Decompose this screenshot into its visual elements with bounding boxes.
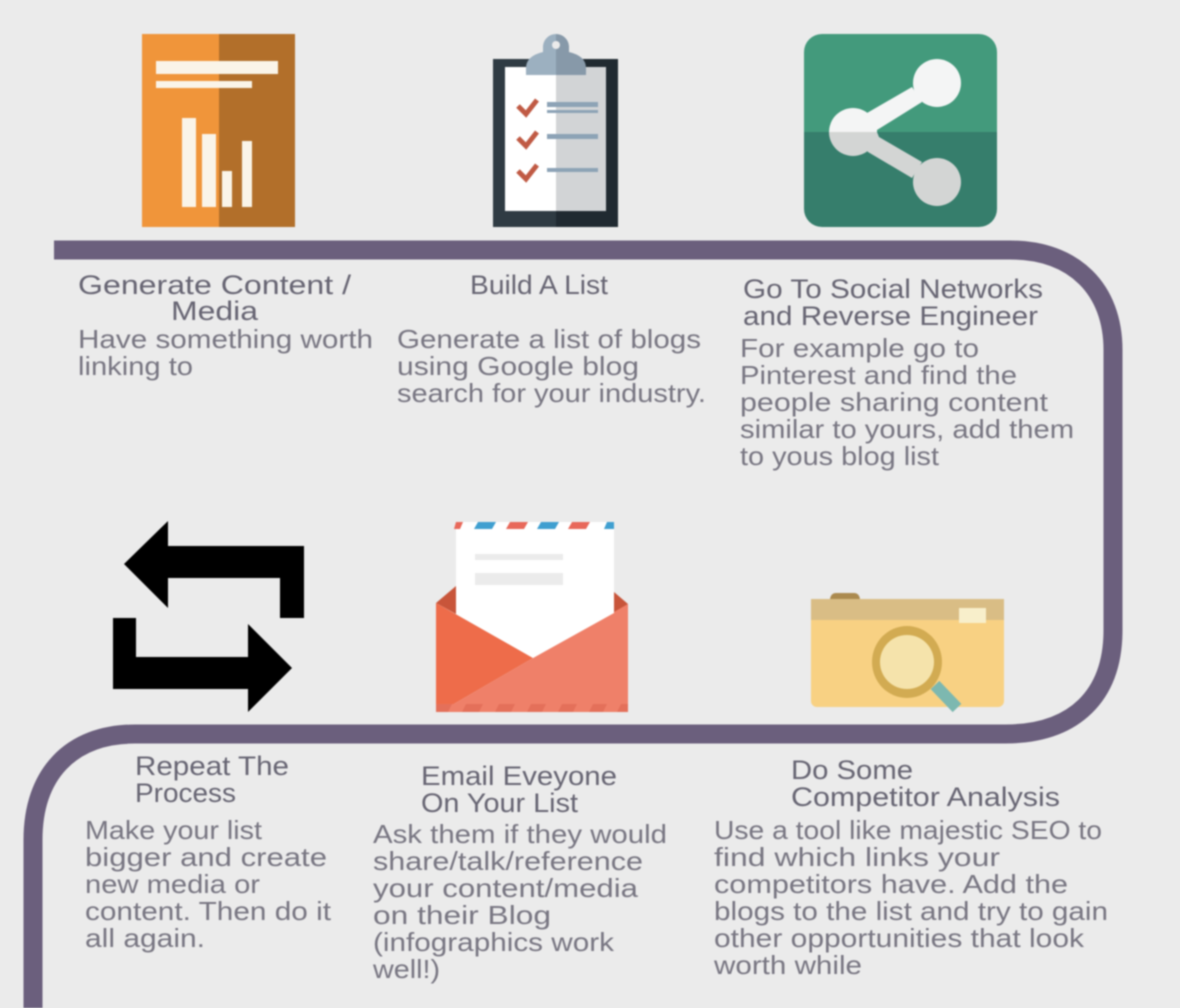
heading: repeat the process: Repeat The xyxy=(135,751,289,781)
heading: generate content xyxy=(78,270,352,326)
text: repeat the process body: content. Then do it xyxy=(85,896,332,926)
text: competitor analysis body xyxy=(713,815,1108,980)
text: social networks body: people sharing content xyxy=(740,387,1049,417)
text: repeat the process body: all again. xyxy=(85,923,205,953)
text: repeat the process body xyxy=(85,815,332,953)
heading: competitor analysis: Do Some xyxy=(791,755,913,785)
heading: generate content: Media xyxy=(171,296,259,326)
heading: social networks xyxy=(743,274,1043,331)
icon: folder camera with magnifier xyxy=(811,593,1004,708)
text: competitor analysis body: other opportunities that look xyxy=(714,923,1085,953)
panel: email everyone xyxy=(372,522,667,984)
text: build a list body xyxy=(397,324,706,408)
icon: repeat arrows xyxy=(113,521,304,712)
text: social networks body: Pinterest and find the xyxy=(740,360,1017,390)
timeline path xyxy=(33,250,1113,1008)
heading: competitor analysis: Competitor Analysis xyxy=(791,782,1060,812)
icon: open envelope with letter xyxy=(436,522,628,712)
heading: repeat the process: Process xyxy=(135,778,236,808)
text: social networks body: to yous blog list xyxy=(740,441,940,471)
text: build a list body: Generate a list of blogs xyxy=(397,324,701,354)
text: social networks body: For example go to xyxy=(740,333,979,363)
icon: report document xyxy=(142,34,295,227)
text: email everyone body: (infographics work xyxy=(373,927,615,957)
text: email everyone body xyxy=(372,819,667,984)
text: repeat the process body: Make your list xyxy=(85,815,263,845)
heading: repeat the process xyxy=(135,751,289,808)
text: social networks body: similar to yours, add them xyxy=(740,414,1074,444)
heading: email everyone: Email Eveyone xyxy=(421,761,617,791)
heading: social networks: and Reverse Engineer xyxy=(743,301,1038,331)
text: generate content body xyxy=(78,324,373,381)
text: email everyone body: well!) xyxy=(372,954,440,984)
text: social networks body xyxy=(740,333,1074,471)
panel: generate content xyxy=(78,34,373,381)
text: repeat the process body: bigger and create xyxy=(85,842,327,872)
icon: share xyxy=(804,34,997,227)
heading: competitor analysis xyxy=(791,755,1060,812)
icon: clipboard checklist xyxy=(493,34,618,227)
panel: social networks xyxy=(740,34,1074,471)
heading: email everyone: On Your List xyxy=(421,788,579,818)
text: competitor analysis body: find which links your xyxy=(714,842,1000,872)
text: email everyone body: Ask them if they would xyxy=(373,819,667,849)
heading: email everyone xyxy=(421,761,617,818)
heading: social networks: Go To Social Networks xyxy=(743,274,1043,304)
text: email everyone body: your content/media xyxy=(373,873,639,903)
panel: competitor analysis xyxy=(713,593,1108,980)
text: build a list body: using Google blog xyxy=(397,351,639,381)
panel: build a list xyxy=(397,34,706,408)
text: competitor analysis body: blogs to the list and try to gain xyxy=(714,896,1108,926)
text: generate content body: Have something worth xyxy=(78,324,373,354)
text: competitor analysis body: competitors have. Add the xyxy=(714,869,1068,899)
text: email everyone body: share/talk/reference xyxy=(373,846,643,876)
text: repeat the process body: new media or xyxy=(85,869,260,899)
text: generate content body: linking to xyxy=(78,351,193,381)
panel: repeat the process xyxy=(85,521,332,953)
text: competitor analysis body: worth while xyxy=(713,950,862,980)
text: email everyone body: on their Blog xyxy=(373,900,551,930)
heading: generate content: Generate Content / xyxy=(78,270,352,300)
text: competitor analysis body: Use a tool like majestic SEO to xyxy=(714,815,1102,845)
heading: build a list: Build A List xyxy=(470,270,609,300)
text: build a list body: search for your industry. xyxy=(397,378,706,408)
